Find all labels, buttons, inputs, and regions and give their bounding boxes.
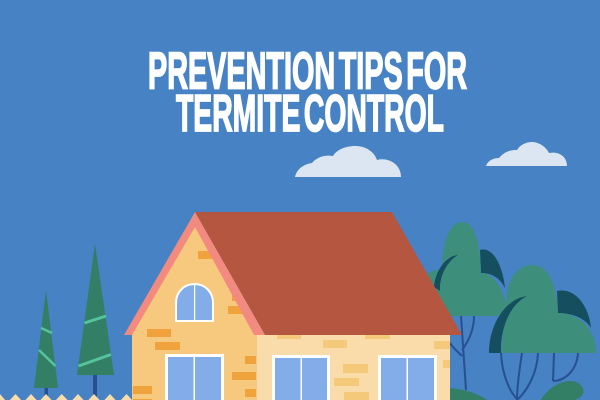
cloud left	[295, 146, 401, 177]
house	[124, 212, 462, 400]
trunks	[501, 353, 578, 400]
title	[148, 42, 467, 143]
window pane	[166, 356, 222, 400]
gable trim	[124, 212, 265, 335]
window middle	[274, 356, 328, 400]
window mullion	[194, 284, 195, 321]
window left	[166, 355, 222, 400]
foliage	[77, 244, 114, 375]
picket fence	[0, 394, 133, 400]
crescent	[434, 255, 458, 291]
tree front right	[489, 265, 596, 400]
window pane	[176, 284, 213, 321]
bush left	[448, 388, 490, 400]
pine tree large	[77, 244, 114, 397]
side wall	[257, 335, 450, 400]
trunks	[450, 316, 474, 390]
trunk	[93, 373, 97, 397]
crescent	[489, 296, 527, 353]
dark lobe	[480, 250, 505, 288]
window mullion	[300, 356, 302, 400]
trunk	[44, 386, 48, 397]
stripes	[39, 328, 56, 366]
pine tree small	[34, 290, 58, 397]
gable bricks	[133, 251, 256, 400]
gable wall	[132, 222, 257, 400]
stripes	[78, 316, 111, 366]
foliage	[501, 265, 596, 353]
cloud right	[486, 142, 567, 166]
window pane	[380, 356, 436, 400]
arched window	[176, 284, 213, 321]
side wall bricks	[277, 335, 450, 400]
dark lobe	[557, 290, 591, 328]
foliage	[425, 222, 507, 316]
roof	[195, 212, 462, 335]
bush right	[540, 381, 583, 400]
window mullion	[194, 355, 195, 400]
window right	[380, 356, 436, 400]
window mullion	[406, 356, 408, 400]
tree back right	[425, 222, 507, 390]
foliage	[34, 290, 58, 388]
window pane	[274, 356, 328, 400]
